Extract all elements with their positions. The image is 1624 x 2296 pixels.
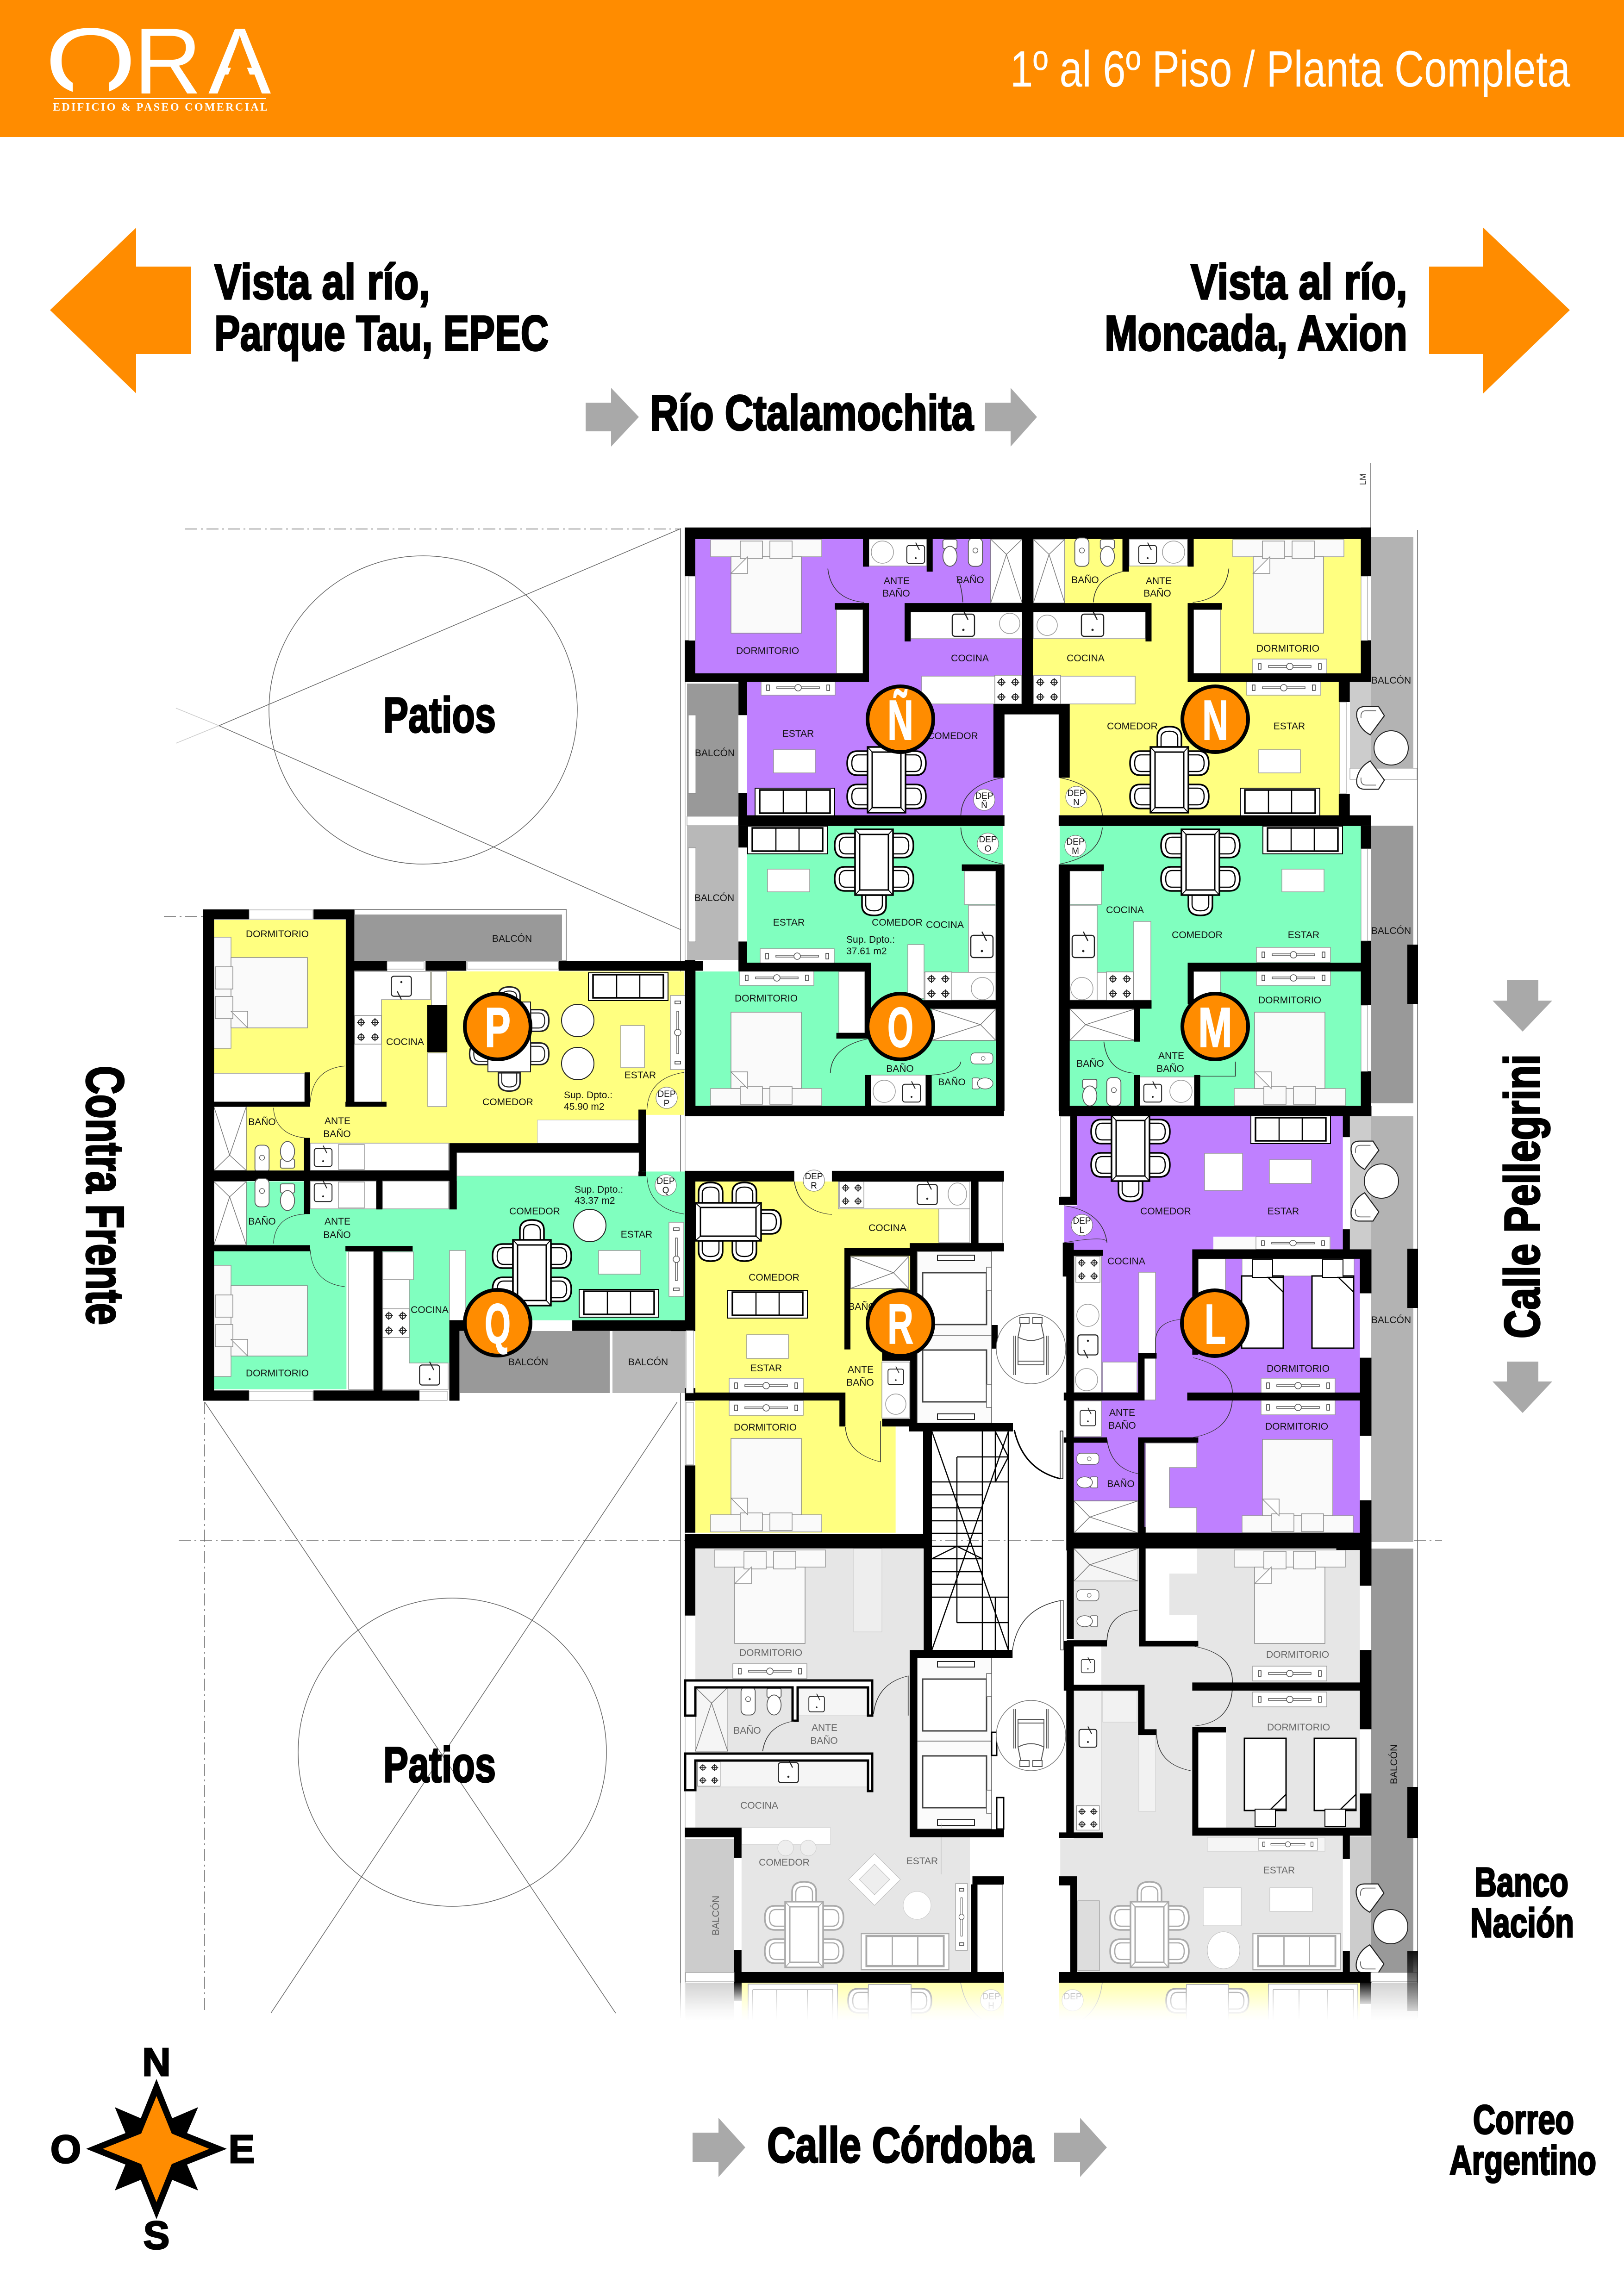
- panel: apartment Q: COMEDOR: [509, 1206, 560, 1217]
- logo: ORA: EDIFICIO & PASEO COMERCIAL: [53, 101, 268, 113]
- panel: apartment R: COMEDOR: [749, 1272, 800, 1283]
- panel: apartment M: ESTAR: [1288, 930, 1319, 940]
- panel: apartment O: BALCÓN: [694, 893, 734, 903]
- river label with arrows: Río Ctalamochita: [650, 385, 974, 441]
- site lines: patios: [164, 463, 1442, 2018]
- panel: apartment N: DORMITORIO: [1256, 643, 1319, 654]
- panel: apartment Q: Q: [662, 1186, 669, 1195]
- panel: apartment P: BALCÓN: [492, 933, 532, 944]
- panel: apartment O: ESTAR: [773, 917, 805, 928]
- compass rose: S: [144, 2214, 169, 2258]
- right view heading: [1105, 254, 1407, 361]
- panel: apartment Q: COCINA: [411, 1305, 449, 1315]
- panel: apartment P: P: [664, 1099, 669, 1108]
- panel: apartment P: [203, 909, 718, 1181]
- panel: apartment L: DORMITORIO: [1265, 1421, 1328, 1432]
- panel: apartment Ñ: DORMITORIO: [736, 646, 799, 656]
- logo: ORA: RA: [134, 9, 271, 114]
- panel: grey reference apartments: [685, 1527, 1399, 1983]
- panel: apartment M: COMEDOR: [1172, 930, 1223, 940]
- panel: apartment Q: DORMITORIO: [246, 1368, 309, 1379]
- panel: apartment M: BALCÓN: [1371, 926, 1411, 936]
- panel: apartment R: COCINA: [868, 1223, 906, 1233]
- badge: Q: [465, 1290, 531, 1356]
- panel: apartment Ñ: COMEDOR: [927, 731, 978, 741]
- panel: apartment L: BAÑO: [1107, 1478, 1135, 1489]
- compass rose: E: [229, 2128, 255, 2172]
- panel: apartment L: DORMITORIO: [1267, 1363, 1330, 1374]
- landmark: Banco Nación: Banco: [1474, 1859, 1568, 1905]
- label: Patios upper: Patios: [383, 687, 496, 743]
- badge: R: R: [887, 1293, 913, 1356]
- badge: Ñ: Ñ: [887, 689, 913, 752]
- panel: apartment R: ESTAR: [750, 1363, 782, 1374]
- panel: apartment N: COCINA: [1067, 653, 1105, 664]
- panel: apartment O: O: [985, 844, 991, 854]
- panel: apartment M: BAÑO: [1076, 1058, 1104, 1069]
- panel: apartment L: ANTE: [1109, 1407, 1135, 1418]
- panel: apartment Ñ: ANTE: [884, 576, 910, 586]
- balconies: [355, 537, 1418, 1973]
- panel: apartment Ñ: Ñ: [981, 800, 987, 810]
- panel: grey reference apartments: DORMITORIO: [739, 1648, 802, 1658]
- panel: apartment O: DORMITORIO: [735, 993, 798, 1004]
- panel: apartment Q: ANTE: [325, 1216, 350, 1227]
- panel: apartment P: BAÑO: [323, 1128, 351, 1139]
- panel: apartment Ñ: BAÑO: [956, 574, 984, 585]
- landmark: Correo Argentino: [1449, 2097, 1596, 2183]
- badge: Ñ: [868, 686, 933, 752]
- landmark: Correo Argentino: Correo: [1473, 2097, 1574, 2142]
- left view heading: Parque Tau, EPEC: [214, 305, 549, 361]
- panel: apartment R: [671, 1170, 1004, 1533]
- panel: apartment N: DEP: [1067, 789, 1086, 798]
- panel: grey reference apartments: ESTAR: [1263, 1865, 1295, 1876]
- panel: apartment Q: DEP: [656, 1176, 675, 1186]
- right view heading: Vista al río,: [1191, 254, 1407, 310]
- panel: apartment Q: 43.37 m2: [575, 1195, 615, 1206]
- left view heading: Vista al río,: [214, 254, 430, 310]
- panel: apartment Q: ESTAR: [621, 1229, 652, 1240]
- panel: apartment P: BAÑO: [248, 1116, 276, 1127]
- logo: ORA: O: [45, 8, 136, 113]
- right view arrow: [1429, 228, 1570, 393]
- panel: apartment N: [1033, 528, 1411, 826]
- panel: apartment L: BAÑO: [1108, 1420, 1136, 1431]
- badge: M: [1182, 994, 1248, 1059]
- floor fade-out at the building cut: [680, 1951, 1418, 2018]
- panel: apartment L: COMEDOR: [1140, 1206, 1191, 1217]
- panel: grey reference apartments: DORMITORIO: [1266, 1649, 1329, 1660]
- panel: apartment O: BAÑO: [886, 1063, 914, 1074]
- panel: apartment Q: BAÑO: [323, 1229, 351, 1240]
- badge: N: [1182, 686, 1248, 752]
- left view arrow: [50, 228, 191, 393]
- panel: grey reference apartments: COCINA: [740, 1800, 778, 1811]
- panel: apartment P: Sup. Dpto.:: [564, 1090, 612, 1101]
- label: Contra Frente: Contra Frente: [75, 1066, 134, 1325]
- right view heading: Moncada, Axion: [1105, 305, 1407, 361]
- order badges: [465, 686, 1248, 1356]
- panel: apartment N: N: [1073, 798, 1080, 808]
- panel: apartment P: COCINA: [386, 1037, 424, 1047]
- stairs: [932, 1431, 1008, 1650]
- panel: apartment R: ANTE: [848, 1364, 874, 1375]
- compass rose: [50, 2041, 255, 2258]
- panel: apartment P: 45.90 m2: [564, 1101, 605, 1112]
- badge: O: O: [887, 996, 913, 1059]
- panel: apartment R: R: [811, 1181, 817, 1191]
- logo: ORA: [45, 8, 271, 114]
- label: Patios lower: Patios: [383, 1736, 496, 1792]
- panel: apartment Ñ: ESTAR: [782, 728, 814, 739]
- panel: apartment N: ANTE: [1146, 576, 1172, 586]
- panel: apartment R: DORMITORIO: [734, 1422, 797, 1433]
- badge: R: [868, 1290, 933, 1356]
- panel: apartment M: M: [1072, 846, 1079, 856]
- panel: apartment Ñ: BALCÓN: [695, 748, 735, 759]
- panel: apartment M: COCINA: [1106, 905, 1144, 915]
- lobby doors: [1014, 1430, 1060, 1479]
- panel: apartment P: DORMITORIO: [246, 929, 309, 940]
- panel: apartment N: COMEDOR: [1107, 721, 1158, 732]
- panel: apartment R: DEP: [805, 1172, 823, 1182]
- panel: grey reference apartments: ESTAR: [906, 1856, 938, 1867]
- badge: P: P: [485, 996, 511, 1059]
- panel: apartment O: COCINA: [926, 920, 964, 930]
- panel: apartment Q: [203, 1153, 718, 1401]
- panel: apartment Ñ: BAÑO: [882, 588, 910, 599]
- panel: apartment N: ESTAR: [1274, 721, 1305, 732]
- badge: Q: Q: [485, 1292, 511, 1355]
- panel: apartment R: BAÑO: [846, 1377, 874, 1388]
- balcony furniture: [1351, 707, 1408, 1973]
- floor fade-out at the building cut: DEP: [1063, 1992, 1082, 2002]
- panel: apartment P: DEP: [657, 1089, 676, 1099]
- panel: grey reference apartments: BALCÓN: [711, 1896, 721, 1935]
- panel: apartment Q: BALCÓN: [508, 1357, 548, 1368]
- panel: apartment M: DORMITORIO: [1258, 995, 1321, 1006]
- panel: apartment N: BAÑO: [1071, 574, 1099, 585]
- panel: grey reference apartments: BAÑO: [810, 1735, 838, 1746]
- badge: L: L: [1205, 1293, 1226, 1356]
- panel: apartment M: BAÑO: [1156, 1063, 1184, 1074]
- panel: apartment R: BAÑO: [848, 1301, 876, 1312]
- panel: apartment N: BAÑO: [1143, 588, 1171, 599]
- panel: apartment L: [1059, 1115, 1411, 1550]
- landmark: Banco Nación: [1470, 1859, 1574, 1946]
- panel: apartment P: ANTE: [325, 1116, 350, 1126]
- panel: apartment O: COMEDOR: [872, 917, 923, 928]
- panel: apartment Q: BAÑO: [248, 1216, 276, 1227]
- panel: grey reference apartments: BAÑO: [733, 1725, 761, 1736]
- panel: apartment Ñ: [685, 528, 1371, 826]
- wall: base of O and M: [685, 1106, 1371, 1116]
- thin bath and kitchen partitions: [685, 1680, 872, 1791]
- left view heading: [214, 254, 549, 361]
- header band: [0, 0, 1624, 137]
- panel: apartment O: 37.61 m2: [846, 946, 887, 957]
- panel: apartment L: ESTAR: [1268, 1206, 1299, 1217]
- compass rose: N: [142, 2041, 171, 2084]
- panel: apartment Ñ: DEP: [975, 791, 993, 801]
- street label: Calle Córdoba with arrows: Calle Córdoba: [767, 2117, 1034, 2173]
- panel: apartment Q: Sup. Dpto.:: [575, 1184, 623, 1195]
- street label: Calle Pellegrini with arrows: Calle Pellegrini: [1494, 1054, 1550, 1338]
- badge: L: [1182, 1290, 1248, 1356]
- panel: apartment N: BALCÓN: [1371, 675, 1411, 686]
- panel: apartment O: [685, 826, 1005, 1111]
- compass rose: O: [50, 2128, 81, 2172]
- badge: P: [465, 994, 531, 1059]
- panel: grey reference apartments: BALCÓN: [1389, 1744, 1399, 1784]
- panel: apartment M: DEP: [1066, 837, 1085, 847]
- panel: apartment O: DEP: [979, 835, 997, 845]
- badge: N: N: [1202, 689, 1228, 752]
- panel: apartment L: BALCÓN: [1371, 1315, 1411, 1325]
- core: elevators and stairs: [909, 1251, 1066, 1829]
- landmark: Banco Nación: Nación: [1470, 1900, 1574, 1946]
- panel: apartment M: [1059, 826, 1411, 1111]
- panel: apartment M: ANTE: [1158, 1051, 1184, 1061]
- panel: apartment L: COCINA: [1107, 1256, 1145, 1267]
- panel: apartment O: BAÑO: [938, 1076, 966, 1088]
- panel: apartment P: COMEDOR: [482, 1097, 533, 1108]
- panel: apartment Ñ: COCINA: [951, 653, 989, 664]
- badge: M: M: [1198, 996, 1232, 1059]
- badge: O: [868, 994, 933, 1059]
- panel: apartment P: ESTAR: [625, 1070, 656, 1081]
- panel: apartment Q: BALCÓN: [628, 1357, 668, 1368]
- panel: apartment O: Sup. Dpto.:: [846, 934, 895, 945]
- floor fade-out at the building cut: H: [988, 2001, 994, 2011]
- floor fade-out at the building cut: DEP: [982, 1992, 1000, 2002]
- label: LM: LM: [1358, 473, 1368, 485]
- panel: grey reference apartments: DORMITORIO: [1267, 1722, 1330, 1733]
- panel: grey reference apartments: ANTE: [812, 1723, 837, 1733]
- panel: grey reference apartments: COMEDOR: [759, 1857, 810, 1868]
- panel: apartment L: L: [1080, 1226, 1084, 1235]
- panel: apartment L: DEP: [1073, 1216, 1091, 1226]
